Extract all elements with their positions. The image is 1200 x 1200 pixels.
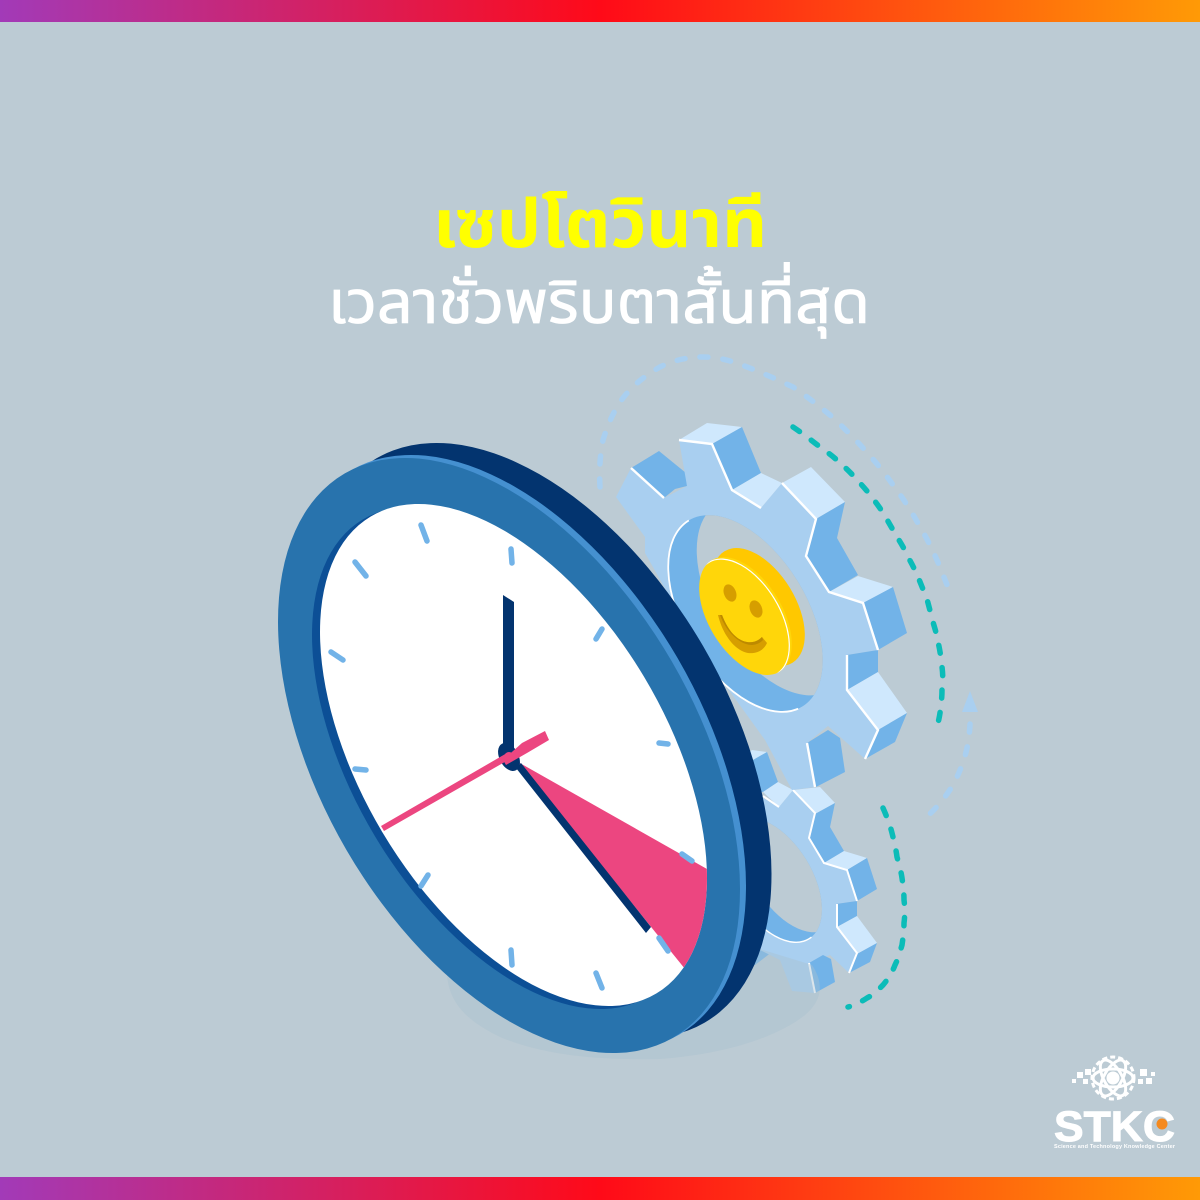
clock front ring bbox=[182, 379, 836, 1132]
logo side dots bbox=[1072, 1069, 1155, 1084]
minute hand bbox=[503, 595, 514, 752]
logo tagline: Science and Technology Knowledge Center bbox=[1054, 1144, 1176, 1150]
clock inner shadow bbox=[232, 441, 779, 1075]
logo wordmark: STKC bbox=[1054, 1103, 1175, 1151]
pink time wedge bbox=[520, 763, 707, 968]
small gear bbox=[750, 750, 877, 994]
ground shadow bbox=[447, 900, 820, 1059]
big gear bbox=[616, 423, 907, 790]
top gradient bar bbox=[0, 0, 1200, 22]
clock rim highlight bbox=[188, 376, 842, 1129]
gear hole bbox=[667, 515, 823, 713]
hour ticks bbox=[331, 525, 692, 988]
clock back rim bbox=[214, 364, 867, 1117]
logo: STKC bbox=[1054, 1056, 1176, 1151]
pink second hand bbox=[381, 731, 549, 831]
clock bbox=[278, 443, 772, 1053]
dashed arc: teal upper bbox=[793, 427, 943, 733]
bottom gradient bar bbox=[0, 1177, 1200, 1200]
title bbox=[328, 186, 870, 339]
arrow: light blue dashed bbox=[925, 691, 978, 818]
title: เซปโตวินาที bbox=[433, 186, 767, 262]
logo orange dot bbox=[1156, 1118, 1168, 1130]
title: เวลาชั่วพริบตาสั้นที่สุด bbox=[328, 262, 870, 339]
dashed arc: teal lower bbox=[848, 808, 905, 1007]
clock face bbox=[240, 438, 787, 1072]
icon: smiley coin bbox=[699, 548, 805, 675]
dashed arc: light blue bbox=[600, 357, 949, 590]
logo atom icon bbox=[1092, 1056, 1134, 1100]
clock hub bbox=[494, 739, 524, 775]
second long hand bbox=[516, 763, 651, 933]
